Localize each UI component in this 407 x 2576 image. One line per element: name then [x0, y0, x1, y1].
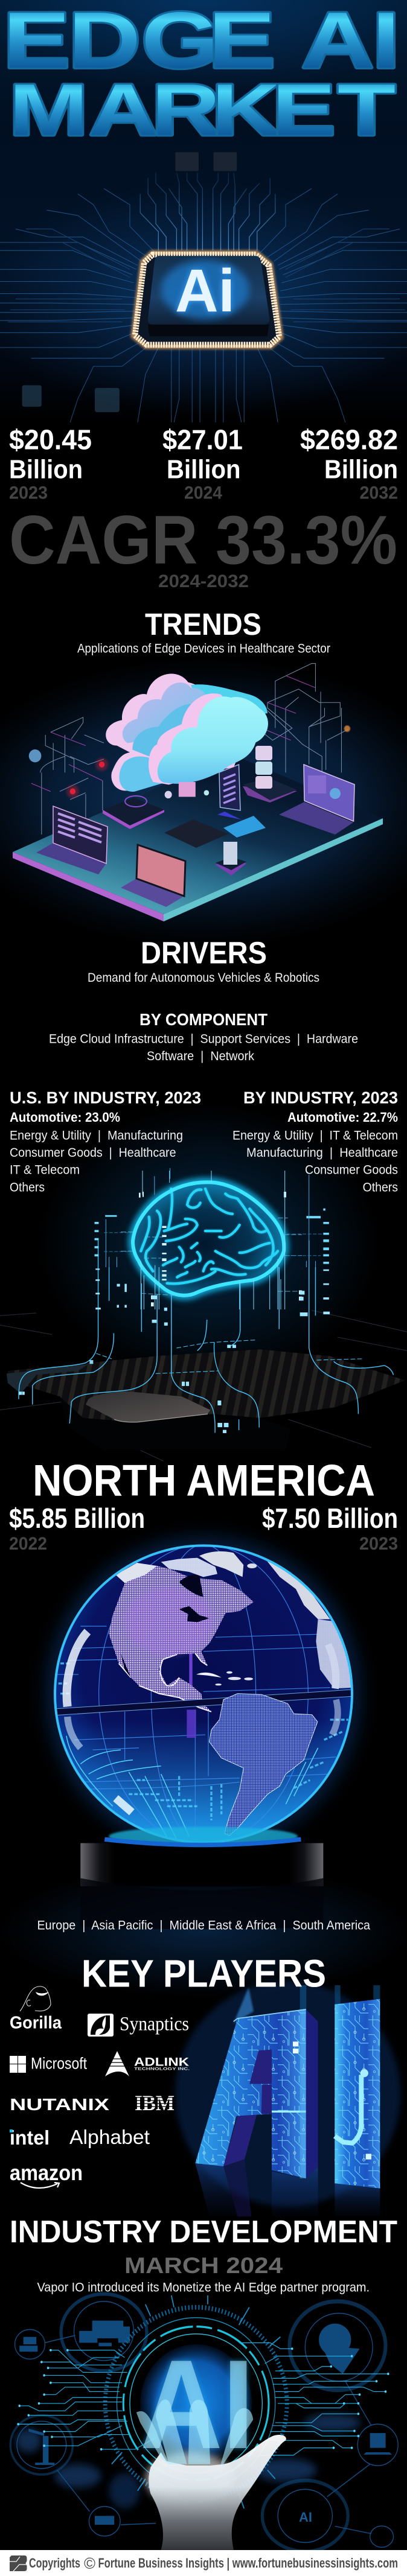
industry development section: MARCH 2024 — [124, 2253, 283, 2278]
small AI chip label: AI — [299, 2510, 312, 2525]
floor and slab — [0, 1310, 407, 1461]
logo: Synaptics: Synaptics — [120, 2014, 189, 2035]
stat 2023: $20.45 — [9, 424, 92, 456]
logo: Synaptics — [88, 2014, 189, 2037]
logo: Microsoft — [10, 2055, 87, 2073]
illustration: AI chip on circuit board — [0, 152, 407, 422]
laptop center — [121, 845, 185, 907]
value 2022: 2022 — [9, 1534, 47, 1554]
upper data columns — [95, 1168, 329, 1267]
illustration: isometric cloud and devices — [0, 658, 407, 947]
platform — [13, 754, 383, 921]
copyright line: © — [84, 2554, 95, 2572]
laptop right — [279, 765, 354, 835]
industry split: U.S.: Energy & Utility | Manufacturing — [10, 1128, 183, 1142]
copyright line — [29, 2554, 398, 2572]
north america — [109, 1563, 254, 1712]
copyright line: Copyrights — [29, 2555, 80, 2571]
industry split: global: Energy & Utility | IT & Telecom — [232, 1128, 398, 1142]
data circuit lines — [19, 1240, 393, 1433]
industry split: U.S. — [10, 1089, 201, 1195]
title — [3, 0, 400, 150]
logo: amazon: amazon — [10, 2160, 83, 2185]
footer bar — [0, 2550, 407, 2576]
industry split: global: Manufacturing | Healthcare — [246, 1146, 398, 1160]
logo: Gorilla — [10, 1986, 62, 2033]
stat 2024: Billion — [167, 454, 240, 484]
laptop left — [36, 806, 107, 874]
reflections — [195, 2159, 380, 2216]
industry split: global: Others — [363, 1180, 398, 1195]
orbs and beacons — [29, 725, 350, 798]
logo: intel: intel — [10, 2126, 50, 2149]
industry development section: Vapor IO introduced its Monetize the AI Edge partner program. — [37, 2281, 370, 2295]
industry split: global: Consumer Goods — [305, 1163, 398, 1177]
industry split: global — [232, 1089, 398, 1195]
drivers section: DRIVERS — [141, 935, 267, 970]
value 2022 — [9, 1503, 145, 1554]
bright reflections — [67, 1632, 88, 1706]
back cloud — [106, 674, 268, 792]
trends heading: Applications of Edge Devices in Healthcare Sector — [77, 642, 330, 656]
by component: Software | Network — [147, 1049, 254, 1063]
key players logos — [10, 1986, 190, 2188]
light beams — [234, 1985, 380, 2023]
illustration: glowing brain on slab — [0, 1104, 407, 1461]
illustration: hand holding AI hologram — [10, 2294, 398, 2551]
hologram AI letters: AI — [140, 2333, 254, 2475]
brain — [121, 1171, 302, 1309]
footer logo — [10, 2555, 27, 2571]
by component: BY COMPONENT — [139, 1010, 268, 1029]
circuit lines — [18, 2343, 388, 2455]
title: MARKET — [9, 69, 396, 150]
north america heading — [9, 1457, 398, 1554]
letter A — [195, 2009, 318, 2178]
africa — [316, 1619, 353, 1688]
chip label: Ai — [175, 257, 235, 325]
central rings — [105, 2295, 287, 2508]
stat 2024: $27.01 — [162, 424, 243, 456]
phone — [217, 765, 256, 827]
industry split: U.S.: Others — [10, 1180, 45, 1195]
stat 2023: 2023 — [9, 483, 48, 503]
stat 2032: 2032 — [360, 483, 398, 503]
industry split: U.S.: Automotive: 23.0% — [10, 1110, 120, 1125]
stat 2024 — [162, 424, 243, 503]
hologram AI letters: AI — [140, 2333, 254, 2475]
trends heading — [77, 607, 330, 656]
front cloud — [149, 693, 268, 784]
value 2022: $5.85 Billion — [9, 1503, 145, 1534]
globe grid — [48, 1545, 336, 1845]
purple beams — [189, 1653, 193, 1691]
north america heading: NORTH AMERICA — [33, 1457, 375, 1505]
logo: Gorilla: Gorilla — [10, 2014, 62, 2033]
stat 2023: Billion — [9, 454, 83, 484]
logo: ADLINK — [105, 2051, 190, 2076]
regions list: Europe | Asia Pacific | Middle East & Africa | South America — [37, 1918, 370, 1932]
value 2023: 2023 — [359, 1534, 398, 1554]
industry split: U.S.: U.S. BY INDUSTRY, 2023 — [10, 1089, 201, 1107]
globe base — [80, 1843, 323, 1929]
stats panel — [9, 424, 398, 591]
network lines — [31, 664, 348, 835]
industry development section: INDUSTRY DEVELOPMENT — [10, 2215, 397, 2250]
illustration: circuit AI letters — [175, 1981, 400, 2216]
brain overlay data strip — [139, 1192, 302, 1306]
logo: Microsoft: Microsoft — [31, 2055, 87, 2073]
server stack — [243, 746, 297, 803]
stat 2023 — [9, 424, 92, 503]
stat 2024: 2024 — [184, 483, 222, 503]
base tower — [216, 842, 246, 876]
trends heading: TRENDS — [145, 607, 261, 641]
center chip — [103, 796, 266, 848]
hand — [136, 2400, 286, 2550]
letter I — [335, 1999, 380, 2189]
industry split: global: BY INDUSTRY, 2023 — [243, 1089, 398, 1107]
corner icon rings — [10, 2294, 398, 2551]
drivers section: Demand for Autonomous Vehicles & Robotics — [88, 971, 319, 985]
logo: Alphabet: Alphabet — [69, 2126, 150, 2148]
stat 2032: Billion — [324, 454, 398, 484]
devices — [36, 746, 354, 907]
logo: IBM: IBM — [135, 2091, 175, 2115]
arctic, greenland, europe — [161, 1558, 217, 1577]
by component — [49, 1010, 358, 1063]
globe sphere — [48, 1545, 362, 1848]
illustration: holographic globe — [27, 1528, 382, 1989]
south america — [210, 1694, 318, 1836]
chip label: Ai — [175, 257, 235, 325]
horizontal band — [48, 1689, 358, 1716]
logo: ADLINK: ADLINK — [134, 2056, 189, 2069]
globe disc — [104, 1827, 301, 1846]
caribbean — [196, 1673, 222, 1678]
industry development section — [10, 2215, 397, 2295]
industry split: U.S.: Consumer Goods | Healthcare — [10, 1146, 176, 1160]
bokeh background — [16, 2414, 361, 2508]
CAGR figure: 2024-2032 — [158, 571, 249, 591]
drivers section — [88, 935, 319, 985]
by component: Edge Cloud Infrastructure | Support Services | Hardware — [49, 1032, 358, 1046]
cloud stack — [29, 674, 350, 798]
industry split: U.S.: IT & Telecom — [10, 1163, 80, 1177]
logo: NUTANIX: NUTANIX — [10, 2095, 109, 2114]
industry split: global: Automotive: 22.7% — [287, 1110, 398, 1125]
hero panel — [0, 0, 407, 422]
stat 2032 — [300, 424, 398, 503]
stat 2032: $269.82 — [300, 424, 398, 456]
value 2023 — [262, 1503, 398, 1554]
logo: ADLINK: TECHNOLOGY INC. — [134, 2067, 190, 2071]
key players heading: KEY PLAYERS — [82, 1951, 326, 1995]
